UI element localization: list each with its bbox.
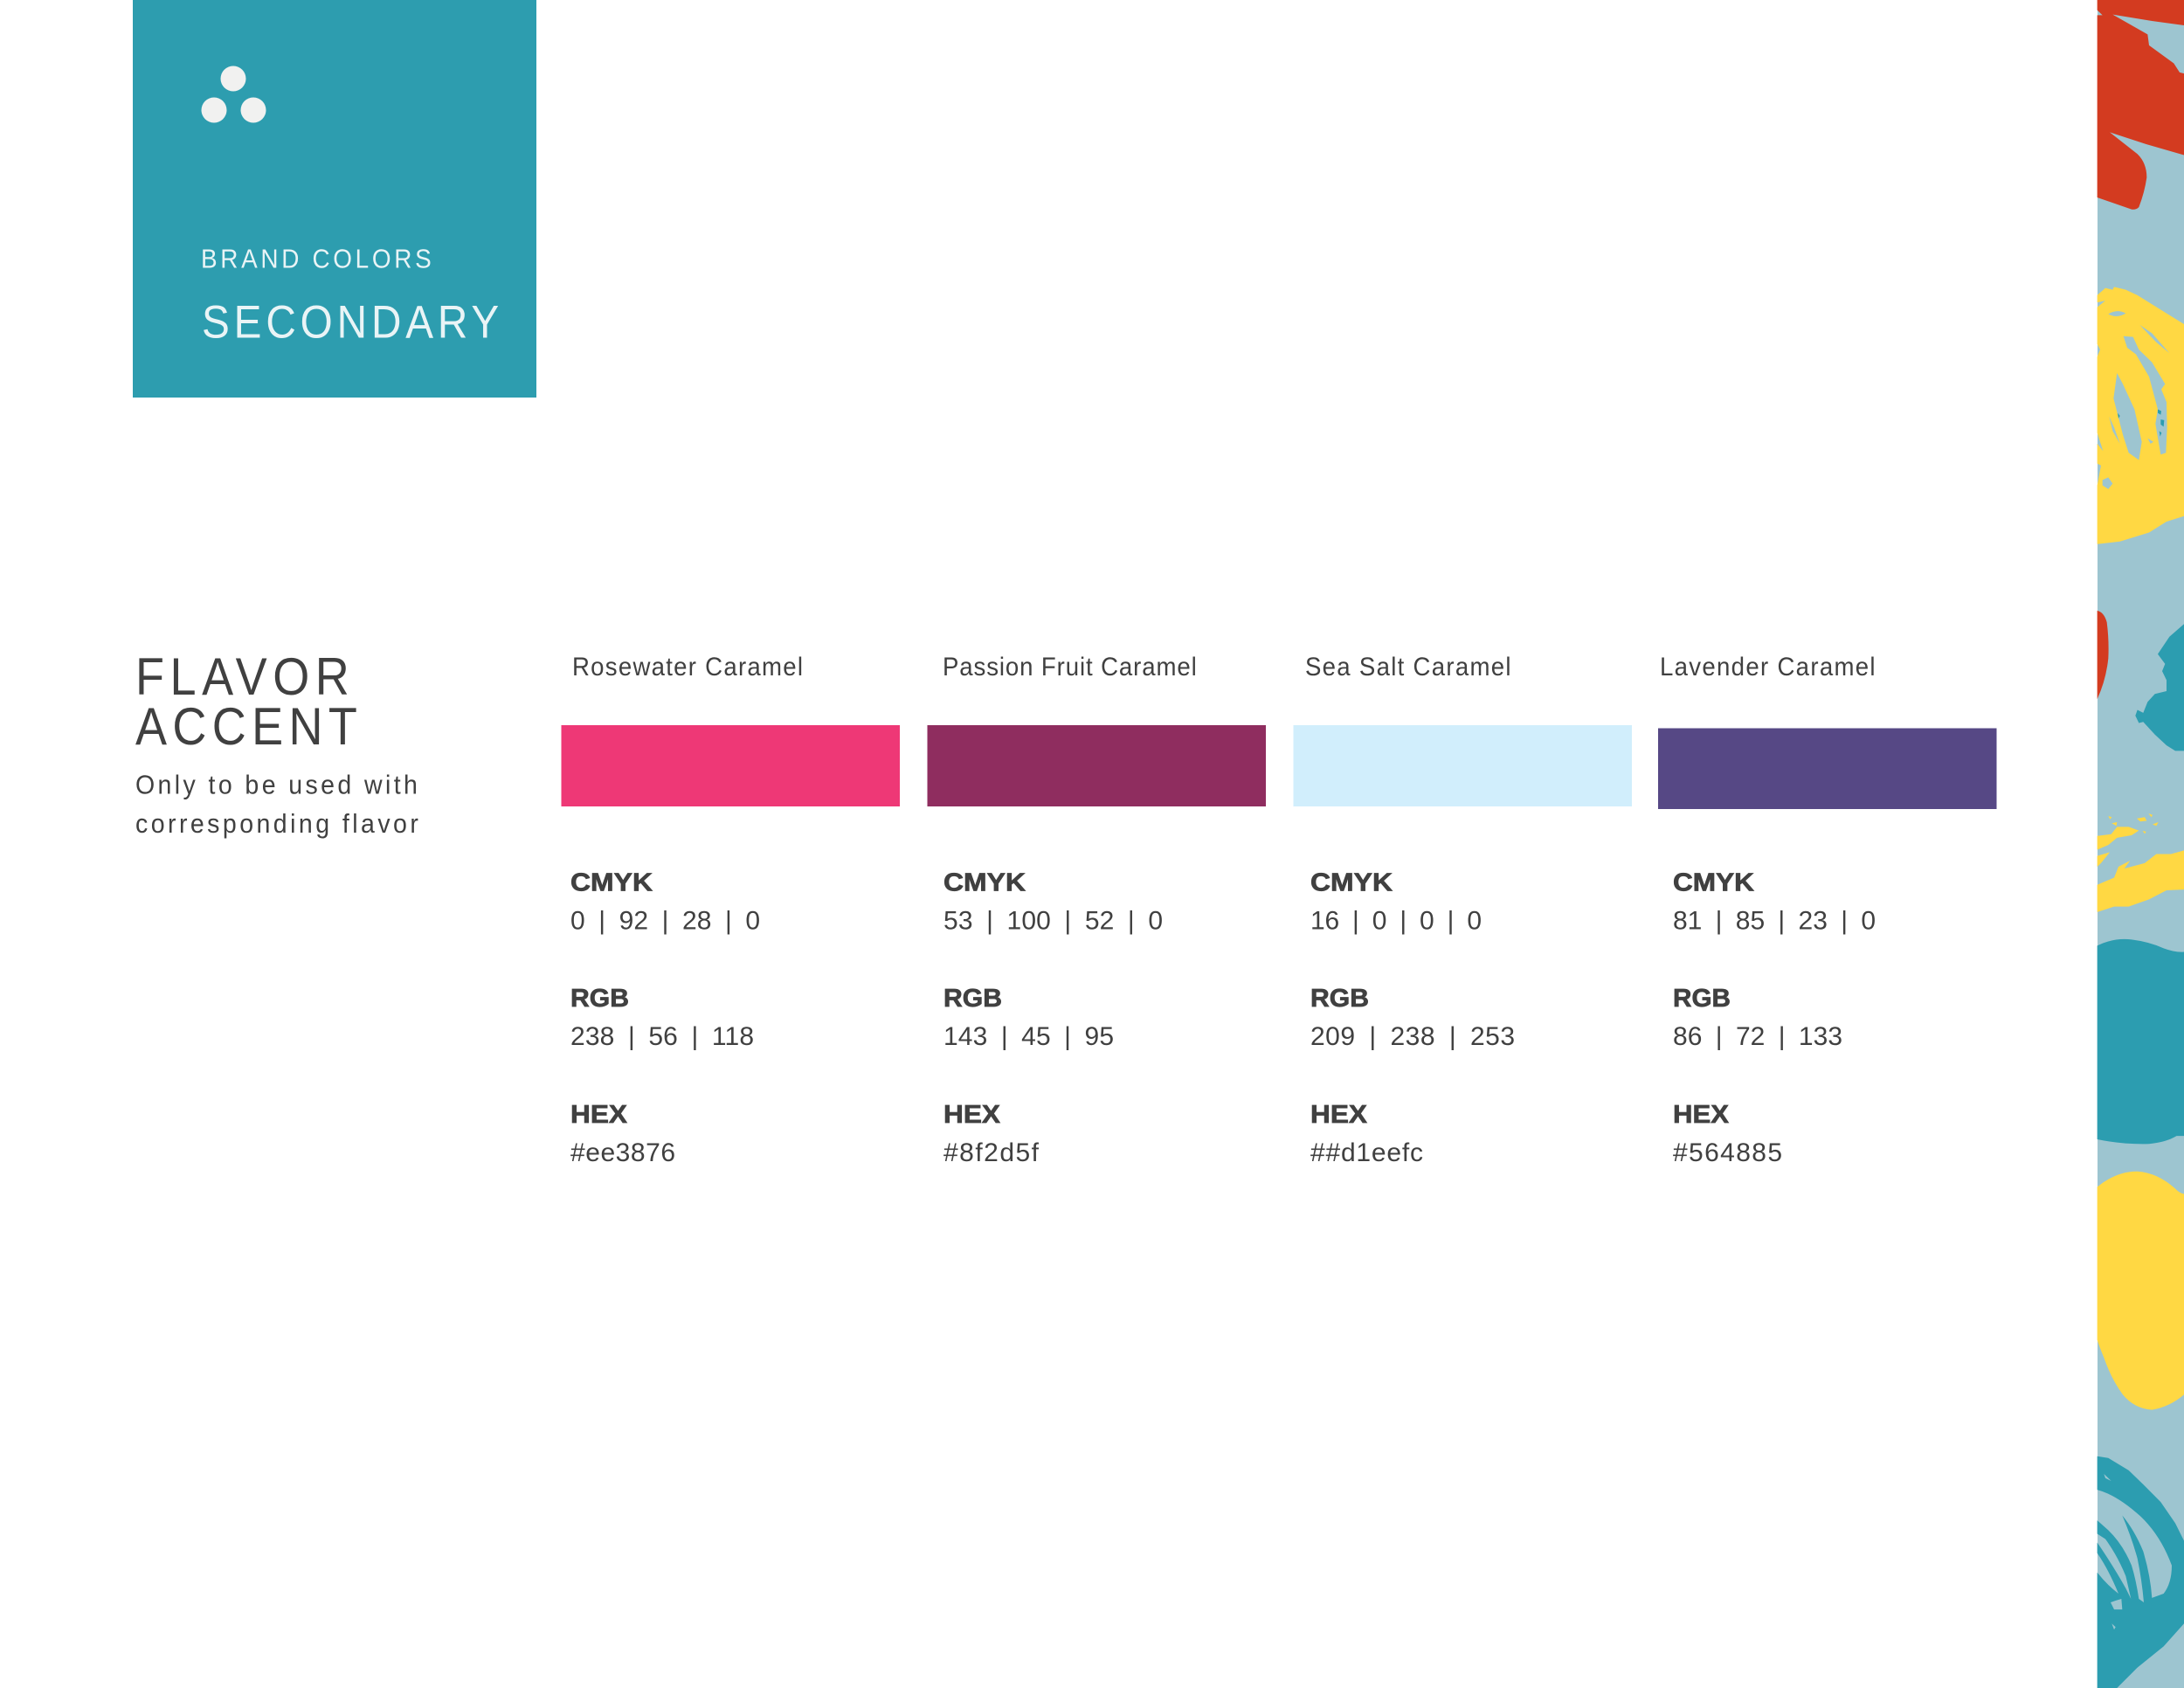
text: brand colors: BRAND COLORS <box>201 244 432 274</box>
rgb values <box>943 985 1114 1051</box>
rgb values: 86 | 72 | 133 <box>1673 1022 1842 1051</box>
rgb values: 209 | 238 | 253 <box>1310 1022 1515 1051</box>
panel: lavender caramel <box>1658 653 1997 1167</box>
hex value: HEX <box>1310 1101 1368 1129</box>
shapes: middle section of strip <box>2098 611 2184 1136</box>
rgb values: RGB <box>1310 985 1369 1013</box>
rgb values: RGB <box>943 985 1002 1013</box>
hex value: HEX <box>943 1101 1001 1129</box>
section heading: flavor accent: FLAVOR <box>135 647 349 707</box>
hex value: ##d1eefc <box>1310 1138 1423 1167</box>
rgb values <box>1310 985 1515 1051</box>
swatch: lavender <box>1658 729 1997 809</box>
teal flecks <box>2118 409 2164 437</box>
icon: three dots <box>201 66 266 122</box>
panel: passion fruit caramel: Passion Fruit Caramel <box>943 653 1197 681</box>
teal blob <box>2098 939 2184 1136</box>
yellow splash <box>2098 813 2184 912</box>
heading: secondary: SECONDARY <box>202 295 499 348</box>
yellow blob <box>2098 1172 2184 1410</box>
hex value: #8f2d5f <box>943 1138 1040 1167</box>
text: usage note <box>135 770 418 839</box>
cmyk values <box>570 868 760 935</box>
panel: lavender caramel: Lavender Caramel <box>1660 653 1876 681</box>
swatch: passion fruit <box>928 725 1266 806</box>
cmyk values <box>1310 868 1482 935</box>
panel: rosewater caramel: Rosewater Caramel <box>572 653 803 681</box>
shapes: top section of strip <box>2098 0 2184 544</box>
hex value: #564885 <box>1673 1138 1782 1167</box>
hex value <box>1310 1101 1423 1167</box>
teal blob bottom <box>2098 1136 2177 1144</box>
text: usage note: corresponding flavor <box>135 809 418 839</box>
rgb values: 238 | 56 | 118 <box>570 1022 754 1051</box>
teal splatter blob <box>2135 624 2184 751</box>
cmyk values: CMYK <box>943 868 1026 896</box>
hex value: HEX <box>1673 1101 1730 1129</box>
hex value: HEX <box>570 1101 628 1129</box>
swatch: rosewater <box>561 725 900 806</box>
shapes: lower section of strip <box>2098 1136 2184 1688</box>
rgb values: RGB <box>570 985 629 1013</box>
cmyk values: 53 | 100 | 52 | 0 <box>943 907 1163 935</box>
cmyk values: 81 | 85 | 23 | 0 <box>1673 907 1876 935</box>
panel: rosewater caramel <box>561 653 900 1167</box>
section heading: flavor accent: ACCENT <box>135 697 357 757</box>
cmyk values: 16 | 0 | 0 | 0 <box>1310 907 1482 935</box>
red blob <box>2098 611 2109 699</box>
panel: sea salt caramel <box>1293 653 1632 1167</box>
cmyk values: CMYK <box>1310 868 1393 896</box>
swatch: sea salt <box>1293 725 1632 806</box>
cmyk values: CMYK <box>1673 868 1754 896</box>
rgb values: RGB <box>1673 985 1731 1013</box>
text: usage note: Only to be used with <box>135 770 418 800</box>
hex value <box>1673 1101 1782 1167</box>
panel: sea salt caramel: Sea Salt Caramel <box>1305 653 1511 681</box>
cmyk values <box>943 868 1163 935</box>
cmyk values: 0 | 92 | 28 | 0 <box>570 907 760 935</box>
hex value <box>570 1101 675 1167</box>
hex value: #ee3876 <box>570 1138 675 1167</box>
panel: passion fruit caramel <box>928 653 1266 1167</box>
panel: header block <box>133 0 536 398</box>
section heading: flavor accent <box>135 647 357 757</box>
hex value <box>943 1101 1040 1167</box>
red brush stroke <box>2098 0 2184 210</box>
cmyk values <box>1673 868 1876 935</box>
cmyk values: CMYK <box>570 868 653 896</box>
yellow brush stroke <box>2098 287 2184 544</box>
teal brush swirl <box>2098 1456 2184 1688</box>
rgb values <box>570 985 754 1051</box>
rgb values <box>1673 985 1842 1051</box>
panel: decorative paint strip <box>2098 0 2184 1688</box>
rgb values: 143 | 45 | 95 <box>943 1022 1114 1051</box>
